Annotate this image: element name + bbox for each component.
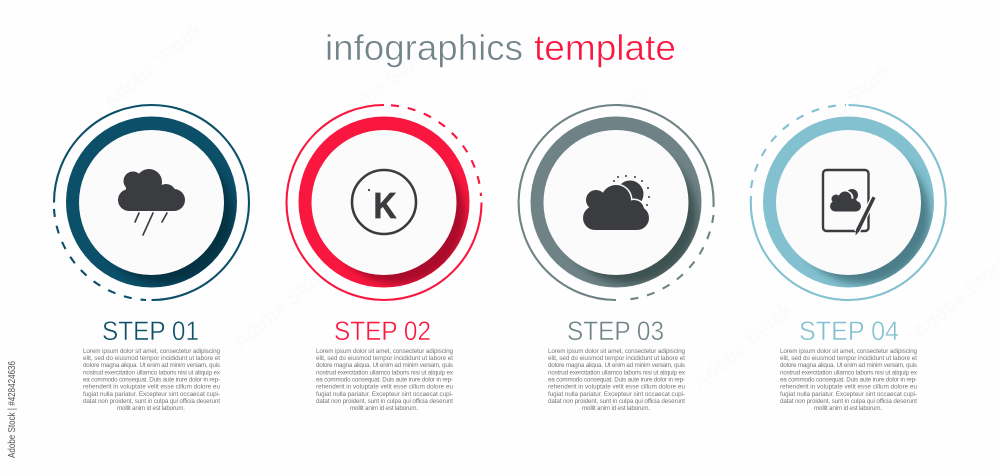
icon: Kelvin xyxy=(352,170,416,234)
text block: step 1: datat non proident, sunt in culpa qui officia deserunt xyxy=(83,398,220,405)
panel: step 2 xyxy=(287,105,482,412)
text block: step 4: datat non proident, sunt in culpa qui officia deserunt xyxy=(780,398,917,405)
title: infographics xyxy=(325,27,523,68)
text block: step 2 xyxy=(316,348,454,412)
ring: step 4 xyxy=(751,105,946,300)
title: template xyxy=(534,27,676,68)
text block: step 2: ea commodo consequat. Duis aute irure dolor in rep- xyxy=(316,376,453,384)
ring: step 3 xyxy=(519,105,714,300)
text block: step 4: mollit anim id est laborum. xyxy=(814,405,882,412)
panel: step 3 xyxy=(519,105,714,412)
disc: step 4 xyxy=(763,116,934,288)
icon: cloud and sun xyxy=(583,175,650,230)
text block: step 1 xyxy=(83,348,221,412)
text block: step 1: Lorem ipsum dolor sit amet, consectetur adipiscing xyxy=(83,348,220,355)
text block: step 1: dolore magna aliqua. Ut enim ad minim veniam, quis xyxy=(83,362,220,369)
text block: step 4: elit, sed do eiusmod tempor incididunt ut labore et xyxy=(780,355,917,362)
text block: step 3 xyxy=(548,348,686,412)
ring: step 2 xyxy=(287,105,482,300)
text block: step 3: mollit anim id est laborum. xyxy=(582,405,650,412)
title xyxy=(325,27,676,68)
disc: step 1 xyxy=(66,116,237,288)
text block: step 2: dolore magna aliqua. Ut enim ad minim veniam, quis xyxy=(316,362,453,369)
text block: step 2: Lorem ipsum dolor sit amet, consectetur adipiscing xyxy=(316,348,453,355)
text block: step 2: elit, sed do eiusmod tempor incididunt ut labore et xyxy=(316,355,453,362)
text block: step 3: fugiat nulla pariatur. Excepteur sint occaecat cupi- xyxy=(548,391,685,398)
text block: step 3: nostrud exercitation ullamco laboris nisi ut aliquip ex xyxy=(548,369,686,376)
text block: step 3: datat non proident, sunt in culpa qui officia deserunt xyxy=(548,398,685,405)
text block: step 3: dolore magna aliqua. Ut enim ad minim veniam, quis xyxy=(548,362,685,369)
text block: step 2: fugiat nulla pariatur. Excepteur sint occaecat cupi- xyxy=(316,391,453,398)
text block: step 4: Lorem ipsum dolor sit amet, consectetur adipiscing xyxy=(780,348,917,355)
icon: rain cloud xyxy=(118,169,185,235)
stock id caption: Adobe Stock | #428424636 xyxy=(6,361,18,458)
text block: step 4: rehenderit in voluptate velit esse cillum dolore eu xyxy=(780,384,917,391)
text block: step 3: rehenderit in voluptate velit esse cillum dolore eu xyxy=(548,384,685,391)
text block: step 1: nostrud exercitation ullamco laboris nisi ut aliquip ex xyxy=(83,369,221,376)
text block: step 4: nostrud exercitation ullamco laboris nisi ut aliquip ex xyxy=(780,369,918,376)
step label: 04: STEP 04 xyxy=(799,316,899,346)
text block: step 2: mollit anim id est laborum. xyxy=(350,405,418,412)
panel: step 1 xyxy=(54,105,249,412)
text block: step 3: ea commodo consequat. Duis aute irure dolor in rep- xyxy=(548,376,685,384)
text block: step 2: nostrud exercitation ullamco laboris nisi ut aliquip ex xyxy=(316,369,454,376)
step label: 02: STEP 02 xyxy=(334,316,431,346)
step label: 01: STEP 01 xyxy=(102,316,199,346)
text block: step 1: ea commodo consequat. Duis aute irure dolor in rep- xyxy=(83,376,220,384)
text block: step 4: dolore magna aliqua. Ut enim ad minim veniam, quis xyxy=(780,362,917,369)
text block: step 3: Lorem ipsum dolor sit amet, consectetur adipiscing xyxy=(548,348,685,355)
step label: 03: STEP 03 xyxy=(567,316,664,346)
text block: step 2: rehenderit in voluptate velit esse cillum dolore eu xyxy=(316,384,453,391)
text block: step 1: elit, sed do eiusmod tempor incididunt ut labore et xyxy=(83,355,220,362)
text block: step 2: datat non proident, sunt in culpa qui officia deserunt xyxy=(316,398,453,405)
text block: step 4: fugiat nulla pariatur. Excepteur sint occaecat cupi- xyxy=(780,391,917,398)
icon: Kelvin: K xyxy=(374,185,396,226)
disc: step 2 xyxy=(298,116,470,288)
disc: step 3 xyxy=(530,116,702,288)
text block: step 4: ea commodo consequat. Duis aute irure dolor in rep- xyxy=(780,376,917,384)
text block: step 4 xyxy=(780,348,918,412)
icon: weather document with pencil xyxy=(823,170,876,236)
text block: step 3: elit, sed do eiusmod tempor incididunt ut labore et xyxy=(548,355,685,362)
text block: step 1: rehenderit in voluptate velit esse cillum dolore eu xyxy=(83,384,220,391)
text block: step 1: mollit anim id est laborum. xyxy=(117,405,185,412)
text block: step 1: fugiat nulla pariatur. Excepteur sint occaecat cupi- xyxy=(83,391,220,398)
panel: step 4 xyxy=(751,105,946,412)
ring: step 1 xyxy=(54,105,249,300)
